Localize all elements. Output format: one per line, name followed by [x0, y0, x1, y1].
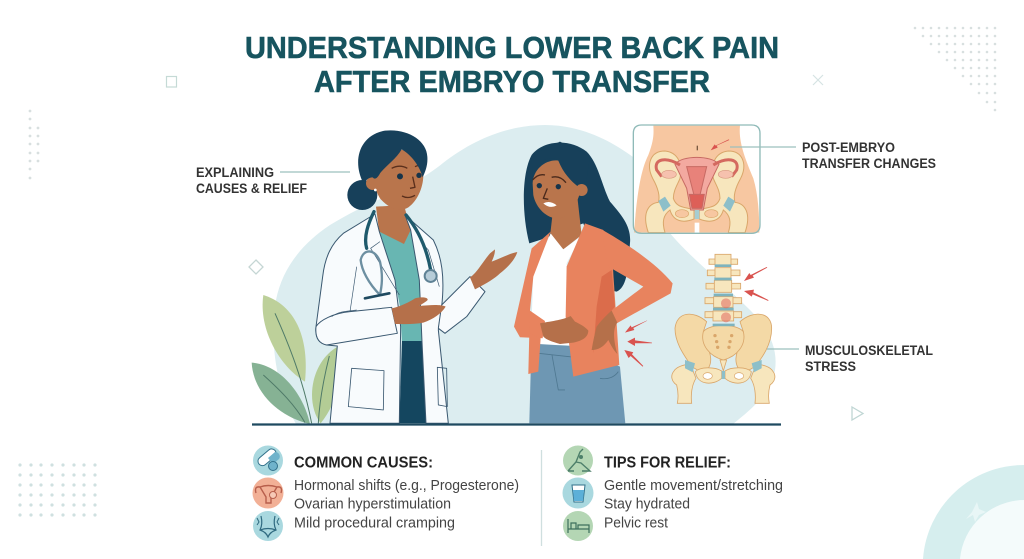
heading: tips for relief: TIPS FOR RELIEF:: [604, 454, 731, 472]
icon: stretching: [563, 446, 593, 476]
reproductive anatomy inset: [633, 125, 760, 233]
spine arrows: [744, 267, 768, 301]
background blob: [273, 125, 776, 424]
icon: ovary: [252, 478, 284, 508]
pelvis wings: [675, 314, 772, 373]
uterus: [656, 157, 737, 210]
decorative corner ring: [923, 465, 1024, 559]
doctor hands: [392, 249, 517, 324]
doctor scrub top: [379, 230, 422, 342]
panel: common causes: [252, 446, 519, 541]
patient head: [533, 160, 588, 249]
heading: common causes: COMMON CAUSES:: [294, 454, 433, 472]
causes list: Ovarian hyperstimulation: [294, 496, 451, 512]
icon: bed: [563, 511, 593, 541]
doctor head and neck: [366, 150, 424, 245]
patient fringe: [532, 142, 590, 186]
causes list: Hormonal shifts (e.g., Progesterone): [294, 478, 519, 494]
title: AFTER EMBRYO TRANSFER: [314, 64, 710, 99]
patient hands: [540, 311, 617, 354]
patient hair back: [524, 143, 630, 292]
label: post-embryo transfer changes: [730, 140, 936, 171]
femurs: [672, 363, 696, 403]
tips list: Gentle movement/stretching: [604, 478, 783, 494]
doctor trousers: [399, 341, 426, 423]
icon: pills: [253, 446, 283, 476]
doctor white coat: [316, 214, 485, 423]
stethoscope: [361, 212, 437, 298]
icon: water glass: [562, 478, 594, 508]
tips list: Stay hydrated: [604, 496, 690, 512]
patient white top: [532, 233, 581, 345]
panel: tips for relief: [562, 446, 783, 541]
pubic rami: [695, 368, 722, 383]
spine and pelvis illustration: [672, 254, 775, 403]
doctor illustration: [316, 130, 517, 423]
doctor hair: [358, 130, 427, 183]
title: [245, 30, 779, 99]
causes list: Mild procedural cramping: [294, 516, 455, 532]
vertebrae: [705, 259, 742, 318]
tips list: [604, 478, 783, 532]
patient jeans: [529, 344, 625, 423]
causes list: [294, 478, 519, 532]
patient illustration: [514, 142, 673, 423]
patient coral cardigan: [514, 223, 673, 377]
label: post-embryo transfer changes: POST-EMBRYO: [802, 140, 895, 155]
pain arrows: [624, 321, 652, 367]
label: musculoskeletal stress: MUSCULOSKELETAL: [805, 343, 933, 358]
title: UNDERSTANDING LOWER BACK PAIN: [245, 30, 779, 65]
label: explaining causes and relief: [196, 165, 350, 196]
label: musculoskeletal stress: STRESS: [805, 359, 856, 374]
plant leaves: [252, 295, 341, 424]
tips list: Pelvic rest: [604, 516, 668, 532]
label: explaining causes and relief: EXPLAINING: [196, 165, 274, 180]
icon: cramping abdomen: [253, 511, 283, 541]
label: musculoskeletal stress: [767, 343, 933, 374]
doctor bun: [347, 180, 377, 210]
label: post-embryo transfer changes: TRANSFER CHANGES: [802, 156, 936, 171]
hip and pelvis bones: [646, 151, 748, 233]
label: explaining causes and relief: CAUSES & RELIEF: [196, 181, 307, 196]
